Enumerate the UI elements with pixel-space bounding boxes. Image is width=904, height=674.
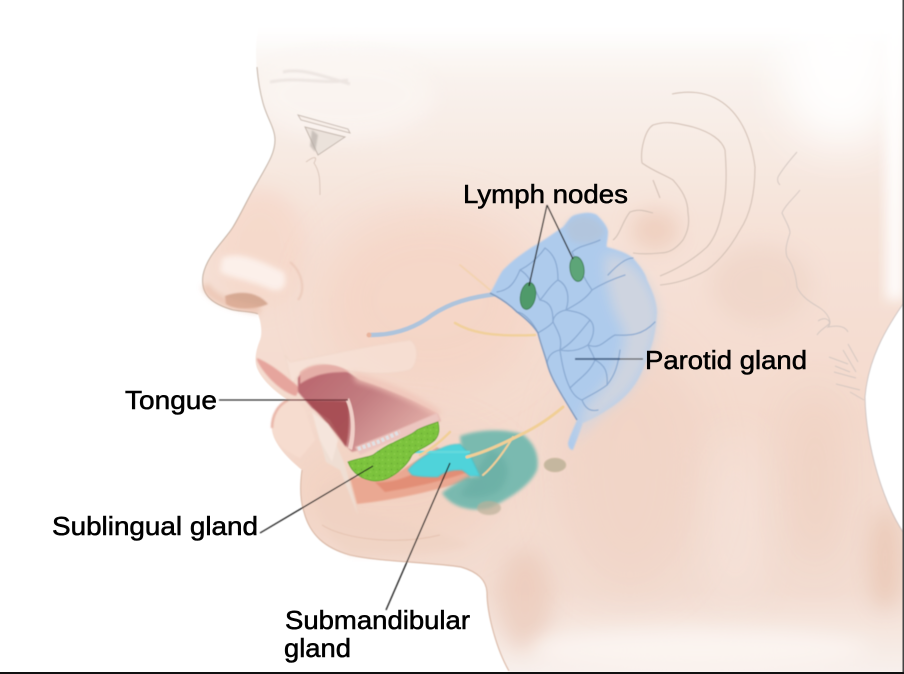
mouth floor bbox=[350, 447, 470, 504]
parotid gland bbox=[490, 213, 658, 450]
lymph node right bbox=[568, 256, 586, 282]
parotid duct bbox=[371, 294, 497, 335]
leader lines bbox=[219, 205, 643, 610]
label: Submandibular gland: Submandibular bbox=[285, 605, 470, 635]
jaw and upper teeth ghost bbox=[285, 340, 470, 555]
duct opening bbox=[366, 332, 372, 338]
lips bbox=[257, 358, 315, 458]
nose detail bbox=[205, 255, 302, 310]
label: Submandibular gland: gland bbox=[284, 633, 351, 663]
node beneath parotid bbox=[544, 458, 566, 472]
submandibular gland bbox=[377, 430, 538, 515]
label: Tongue: Tongue bbox=[125, 385, 217, 415]
hairline bbox=[778, 152, 864, 400]
label: Parotid gland: Parotid gland bbox=[645, 345, 807, 375]
label: Lymph nodes: Lymph nodes bbox=[463, 179, 628, 209]
artwork bbox=[190, 0, 904, 672]
eye and brow bbox=[270, 71, 350, 195]
ear outline bbox=[613, 92, 755, 285]
mouth cavity bbox=[298, 364, 442, 462]
label: Submandibular gland bbox=[284, 605, 470, 663]
label: Sublingual gland: Sublingual gland bbox=[52, 511, 258, 541]
parotid lobules bbox=[497, 240, 655, 411]
nerves bbox=[420, 265, 563, 475]
sublingual gland bbox=[348, 422, 439, 481]
lymph node left bbox=[518, 281, 538, 311]
head and neck skin bbox=[190, 0, 904, 672]
